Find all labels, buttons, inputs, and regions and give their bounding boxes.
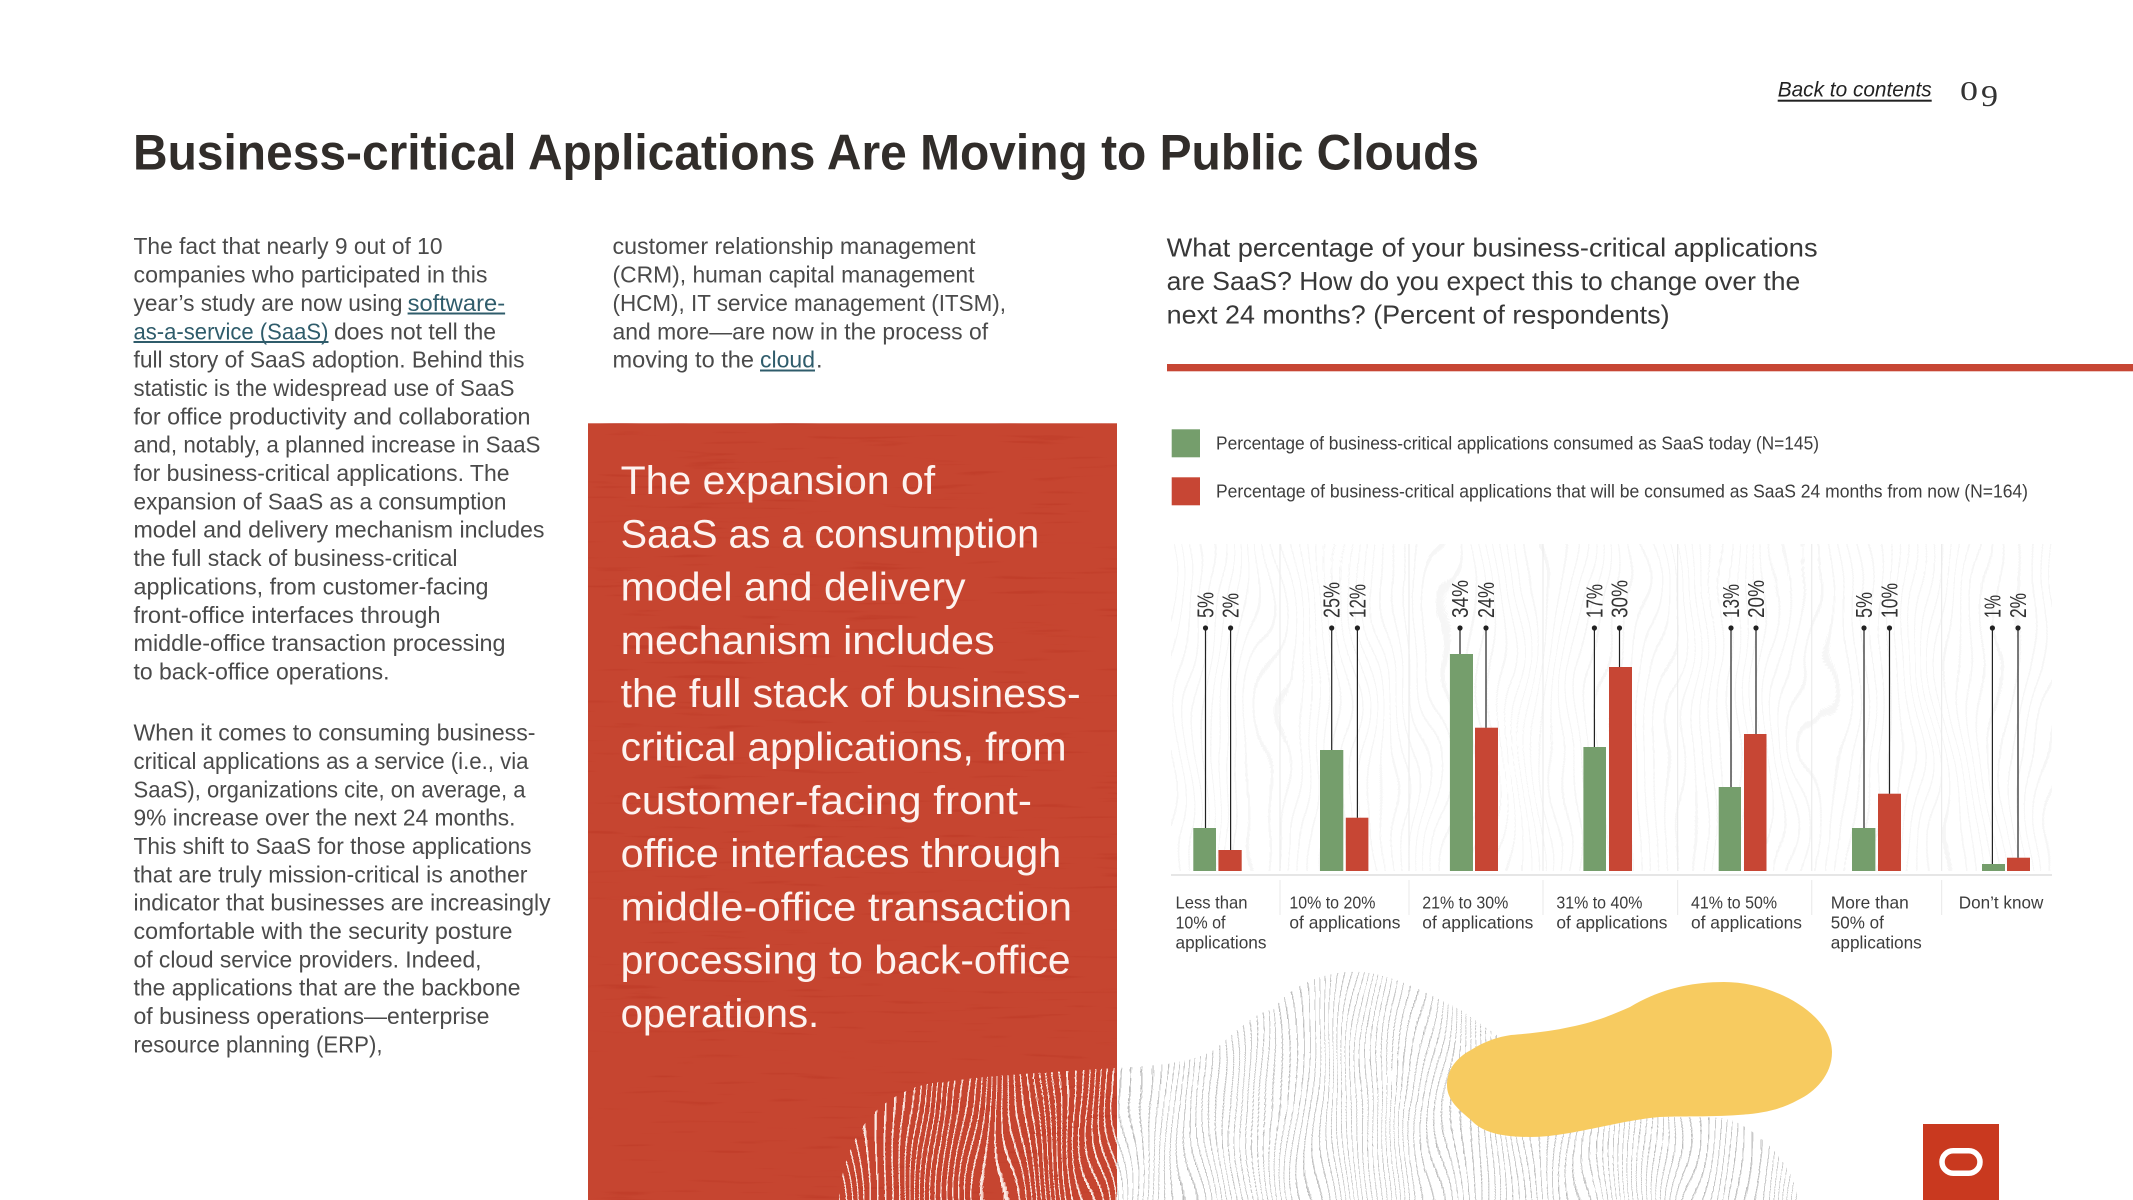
category axis labels: applications [1176,932,1267,952]
text block: middle column [612,233,1006,373]
text block: left column paragraph 2: critical applications as a service (i.e., via [134,748,529,774]
pull quote text: mechanism includes [621,619,995,663]
chart: bar chart of SaaS share [1171,544,2052,952]
page number: 0 [1960,76,1978,106]
legend item: today: Percentage of business-critical applications consumed as SaaS today (N=145) [1216,433,1819,453]
category axis labels: 31% to 40% [1556,892,1642,912]
text block: left column paragraph 2: indicator that businesses are increasingly [134,890,551,916]
group: more than 50%: 10% [1876,583,1902,618]
group: less than 10%: 2% [1218,593,1244,618]
text block: left column paragraph 1: year’s study are now using [134,290,402,316]
text block: left column paragraph 2: comfortable with the security posture [134,918,512,944]
group: 31% to 40%: 30% [1606,580,1632,618]
chart heading question [1167,232,1818,330]
pull quote text: The expansion of [621,459,936,503]
text block: left column paragraph 1: to back-office operations. [134,658,390,684]
icon: Oracle logo [1923,1124,1999,1200]
group: 21% to 30% [1447,580,1499,871]
text block: left column paragraph 1: the full stack of business-critical [134,545,458,571]
group: 21% to 30%: 34% [1447,580,1473,618]
category axis labels: 41% to 50% [1691,892,1777,912]
group: more than 50% [1851,583,1902,871]
pull quote text: office interfaces through [621,832,1061,876]
chart background pattern [1171,544,2052,871]
navigation: back to contents link: Back to contents [1778,79,1932,102]
text block: middle column: cloud [760,347,815,373]
wood grain blob: grey lines on white [1117,972,1797,1200]
text block: left column paragraph 2: of business operations—enterprise [134,1003,490,1029]
group: more than 50%: 5% [1851,592,1877,618]
category axis labels: More than [1831,892,1909,912]
group: 41% to 50%: 20% [1743,580,1769,618]
group: don't know [1979,593,2031,871]
chart heading question: What percentage of your business-critical applications [1167,232,1818,262]
category axis labels: 10% to 20% [1289,892,1375,912]
chart heading question: are SaaS? How do you expect this to change over the [1167,266,1800,296]
group: 10% to 20%: 12% [1344,584,1370,618]
text block: middle column: moving to the [612,347,754,373]
text block: left column paragraph 2: SaaS), organizations cite, on average, a [134,776,526,802]
text block: left column paragraph 1: software- [408,290,505,316]
text block: left column paragraph 1: full story of SaaS adoption. Behind this [134,347,524,373]
category axis labels: of applications [1422,912,1534,932]
text block: left column paragraph 2: 9% increase over the next 24 months. [134,805,516,831]
legend [1172,429,2028,505]
text block: left column paragraph 1: middle-office transaction processing [134,630,506,656]
text block: left column paragraph 1: The fact that nearly 9 out of 10 [134,233,442,259]
text block: left column paragraph 2: of cloud service providers. Indeed, [134,946,482,972]
category axis labels: 10% of [1176,912,1226,932]
text block: left column paragraph 1: does not tell the [334,318,496,344]
group: 41% to 50%: 13% [1718,584,1744,618]
text block: left column paragraph 1: for office productivity and collaboration [134,403,530,429]
group: less than 10%: 5% [1192,592,1218,618]
text block: middle column: (HCM), IT service management (ITSM), [612,290,1006,316]
page number [1960,76,1998,113]
text block: left column paragraph 1: as-a-service (SaaS) [134,318,328,344]
title: Business-critical Applications Are Moving to Public Clouds [133,124,1479,180]
category axis labels: Less than [1176,892,1248,912]
pull quote text: critical applications, from [621,726,1067,770]
legend item: today [1172,429,1819,457]
group: 31% to 40%: 17% [1581,584,1607,618]
red divider rule [1167,364,2133,371]
chart heading question: next 24 months? (Percent of respondents) [1167,300,1670,330]
text block: left column paragraph 1: front-office interfaces through [134,602,440,628]
text block: left column paragraph 1: companies who participated in this [134,262,488,288]
group: 21% to 30%: 24% [1473,582,1499,618]
legend item: 24 months [1172,477,2028,505]
category axis labels: of applications [1289,912,1401,932]
group: 10% to 20%: 25% [1319,582,1345,618]
text block: left column paragraph 2: that are truly mission-critical is another [134,861,528,887]
group: don't know: 1% [1979,595,2005,618]
pull quote text: processing to back-office [621,939,1071,983]
group: 31% to 40% [1581,580,1632,871]
pull quote text: customer-facing front- [621,779,1032,823]
category axis labels [1176,892,2044,952]
pull quote text: SaaS as a consumption [621,512,1039,556]
page number: 9 [1981,78,1998,113]
category axis labels: of applications [1556,912,1668,932]
text block: left column paragraph 1 [134,233,544,684]
group: don't know: 2% [2005,593,2031,618]
text block: left column paragraph 1: model and delivery mechanism includes [134,517,544,543]
text block: left column paragraph 2 [134,720,551,1057]
category axis labels: applications [1831,932,1922,952]
category axis labels: of applications [1691,912,1802,932]
category axis labels: 21% to 30% [1422,892,1508,912]
text block: middle column: customer relationship management [612,233,976,259]
legend item: 24 months: Percentage of business-critical applications that will be consumed as SaaS 24 months from now (N=164) [1216,482,2028,502]
text block: left column paragraph 1: expansion of SaaS as a consumption [134,488,506,514]
yellow blob [1447,982,1832,1137]
text block: left column paragraph 1: statistic is the widespread use of SaaS [134,375,514,401]
pull quote text [621,459,1081,1036]
text block: left column paragraph 1: applications, from customer-facing [134,573,488,599]
pull quote text: middle-office transaction [621,885,1072,929]
text block: left column paragraph 1: for business-critical applications. The [134,460,510,486]
pull quote text: model and delivery [621,566,966,610]
text block: left column paragraph 1: and, notably, a planned increase in SaaS [134,432,540,458]
text block: left column paragraph 2: the applications that are the backbone [134,975,520,1001]
pull quote text: operations. [621,992,819,1036]
text block: middle column: (CRM), human capital management [612,262,975,288]
text block: middle column: and more—are now in the process of [612,318,989,344]
text block: left column paragraph 2: This shift to SaaS for those applications [134,833,532,859]
wood grain blob: white lines on red panel [839,1068,1117,1200]
group: 10% to 20% [1319,582,1370,871]
category axis labels: Don’t know [1959,892,2044,912]
text block: middle column: . [816,347,823,373]
panel: red pull quote [588,423,1117,1200]
category axis labels: 50% of [1831,912,1884,932]
text block: left column paragraph 2: When it comes to consuming business- [134,720,536,746]
group: 41% to 50% [1718,580,1769,871]
pull quote text: the full stack of business- [621,672,1081,716]
text block: left column paragraph 2: resource planning (ERP), [134,1031,382,1057]
group: less than 10% [1192,592,1244,871]
